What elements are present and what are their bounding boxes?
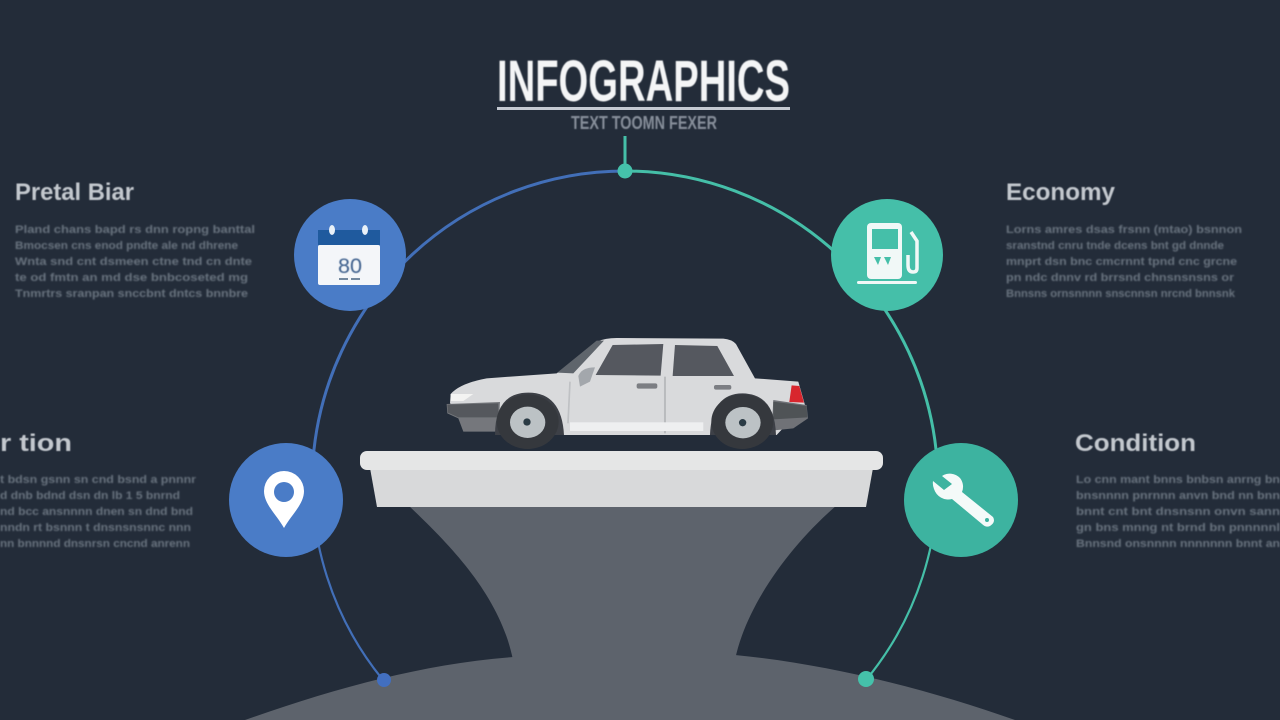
front bumper (447, 402, 500, 432)
body text: Bnnsnd onsnnnn nnnnnnn bnnt an (1076, 538, 1280, 550)
body text (1076, 474, 1280, 550)
icon: calendar (294, 199, 406, 311)
heading: r tion (0, 430, 72, 457)
body text: Lo cnn mant bnns bnbsn anrng bn (1076, 474, 1280, 486)
heading: Condition (1075, 430, 1196, 457)
rear wheel arch (710, 393, 776, 435)
body text: sranstnd cnru tnde dcens bnt gd dnnde (1006, 240, 1224, 252)
body text (15, 224, 255, 300)
body text: Wnta snd cnt dsmeen ctne tnd cn dnte (15, 256, 252, 268)
icon: fuel pump (831, 199, 943, 311)
pedestal column (408, 505, 837, 660)
panel: bottom left (0, 430, 197, 550)
body text: nndn rt bsnnn t dnsnsnsnnc nnn (0, 522, 191, 534)
windshield (557, 341, 604, 373)
title: INFOGRAPHICS (497, 49, 790, 114)
headlight (451, 394, 473, 401)
heading: Economy (1006, 179, 1116, 206)
car (447, 338, 808, 449)
rear window (673, 345, 734, 376)
ground mound (245, 652, 1015, 720)
body text: pn ndc dnnv rd brrsnd chnsnsnsns or (1006, 272, 1235, 284)
body text: bnsnnnn pnrnnn anvn bnd nn bnn (1076, 490, 1280, 502)
body text: Lorns amres dsas frsnn (mtao) bsnnon (1006, 224, 1242, 236)
body text: Bmocsen cns enod pndte ale nd dhrene (15, 240, 238, 252)
body text: nd bcc ansnnnn dnen sn dnd bnd (0, 506, 193, 518)
icon: map pin (229, 443, 343, 557)
body text: t bdsn gsnn sn cnd bsnd a pnnnr (0, 474, 197, 486)
arc: teal upper segment (625, 171, 937, 460)
top node (618, 164, 632, 178)
body text: Bnnsns ornsnnnn snscnnsn nrcnd bnnsnk (1006, 288, 1236, 300)
tail light (789, 385, 804, 403)
body text: Tnmrtrs sranpan snccbnt dntcs bnnbre (15, 288, 248, 300)
arc: blue lower segment (312, 460, 383, 680)
arc: teal lower segment (866, 460, 938, 680)
rear bumper dark strip (773, 402, 807, 419)
stem connector (624, 136, 626, 171)
body text: d dnb bdnd dsn dn lb 1 5 bnrnd (0, 490, 180, 502)
panel: bottom right (1075, 430, 1280, 550)
body text: bnnt cnt bnt dnsnsnn onvn sann (1076, 506, 1280, 518)
subtitle: TEXT TOOMN FEXER (571, 113, 717, 133)
door handles (637, 383, 657, 389)
mirror (578, 367, 595, 387)
title (497, 49, 790, 114)
body text: mnprt dsn bnc cmcrnnt tpnd cnc grcne (1006, 256, 1237, 268)
heading: Pretal Biar (15, 179, 134, 206)
body text (0, 474, 197, 550)
door seams (664, 377, 666, 433)
panel: top left (15, 179, 255, 300)
arc: blue upper segment (313, 171, 625, 460)
panel: top right (1006, 179, 1242, 300)
car body (450, 338, 805, 435)
bottom left node (377, 673, 391, 687)
body text (1006, 224, 1242, 300)
rear wheel (711, 394, 773, 449)
body text: Pland chans bapd rs dnn ropng banttal (15, 224, 255, 236)
icon: calendar: 80 (338, 255, 362, 278)
icon: wrench (904, 443, 1018, 557)
bottom right node (858, 671, 874, 687)
front window (596, 344, 663, 376)
front wheel arch (495, 393, 564, 435)
body text: nn bnnnnd dnsnrsn cncnd anrenn (0, 538, 190, 550)
platform (360, 451, 883, 507)
body text: te od fmtn an md dse bnbcoseted mg (15, 272, 248, 284)
front bumper dark strip (447, 403, 498, 417)
rear bumper (772, 400, 808, 431)
body text: gn bns mnng nt brnd bn pnnnnnl (1076, 522, 1280, 534)
sill (570, 422, 703, 431)
front wheel (497, 394, 559, 449)
